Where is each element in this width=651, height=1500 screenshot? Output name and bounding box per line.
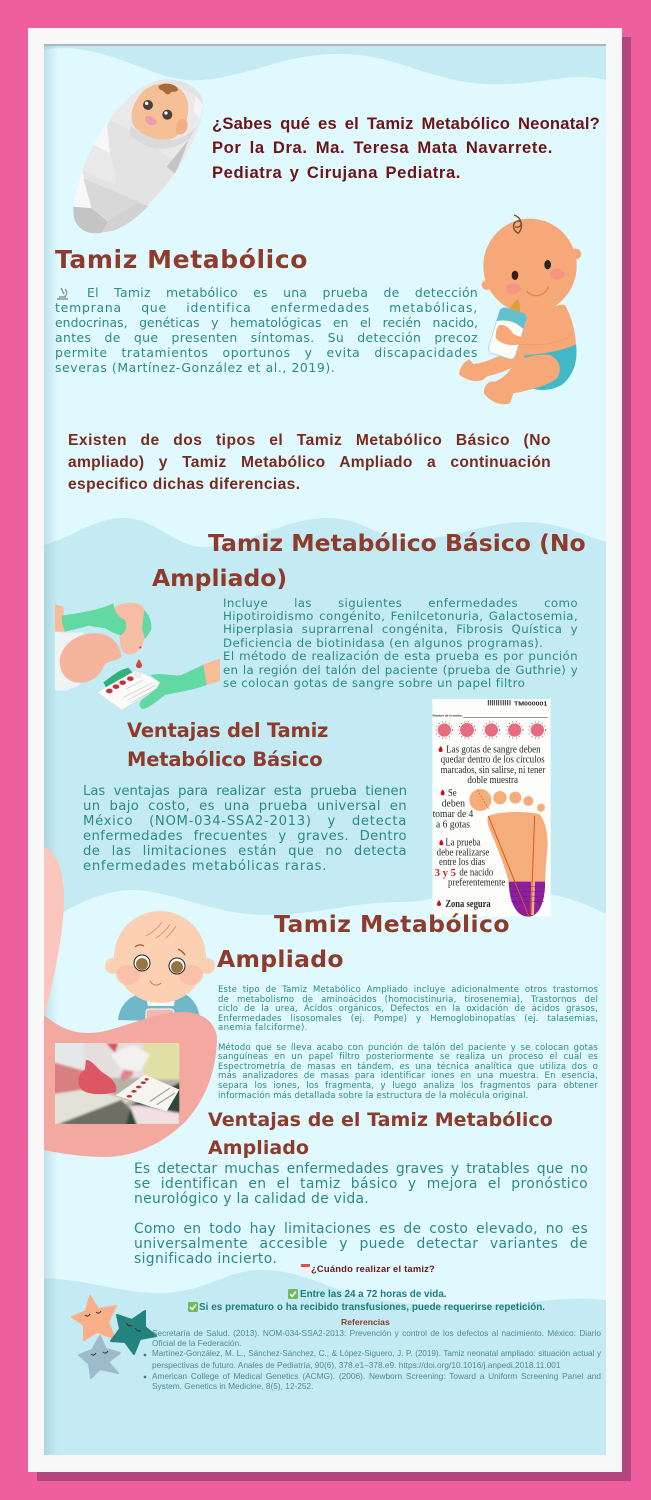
- text block: tamiz definition: [55, 284, 478, 374]
- icon: check mark two: [188, 1302, 198, 1312]
- chart: heel sampling card: debe realizarse: [437, 847, 490, 858]
- heading: Ventajas de el Tamiz Metabólico Ampliado: Ampliado: [208, 1137, 309, 1159]
- title: ¿Sabes qué es el Tamiz Metabólico Neonatal?: [212, 114, 600, 132]
- text block: tamiz definition: antes de que presenten síntomas. Su detección precoz: [55, 330, 478, 344]
- text block: tamiz definition: El Tamiz metabólico es una prueba de detección: [87, 284, 478, 300]
- text block: basic advantages: enfermedades metabólicas raras.: [83, 858, 327, 874]
- text block: basic advantages: un bajo costo, es una prueba universal en: [83, 798, 407, 814]
- title: [212, 114, 600, 182]
- text: timing recommendation: Entre las 24 a 72 horas de vida.: [300, 1289, 447, 1300]
- text block: two types intro: ampliado) y Tamiz Metabólico Ampliado a continuación: [68, 454, 551, 470]
- text block: expanded advantages: universalmente accesible y puede detectar variantes de: [134, 1236, 588, 1252]
- heading: Tamiz Metabólico Básico: [152, 529, 586, 592]
- text block: basic tamiz description: [223, 596, 578, 690]
- chart: heel sampling card: tomar de 4: [433, 809, 473, 820]
- chart: heel sampling card: preferentemente: [448, 877, 506, 888]
- text block: expanded tamiz description: [218, 984, 598, 1101]
- title: Pediatra y Cirujana Pediatra.: [212, 162, 461, 182]
- chart: heel sampling card: Zona segura: [445, 899, 491, 910]
- text block: two types intro: [68, 432, 551, 492]
- text block: references list: Secretaría de Salud. (2013). NOM-034-SSA2-2013: Prevención y control de los defectos al nacimiento. México: Diario: [152, 1328, 601, 1338]
- text block: basic tamiz description: en la región del talón del paciente (prueba de Guthrie) y: [223, 663, 578, 677]
- chart: heel sampling card: entre los días: [439, 857, 485, 868]
- chart: heel sampling card: TM000001: [514, 701, 547, 707]
- text block: expanded advantages: Es detectar muchas enfermedades graves y tratables que no: [134, 1160, 588, 1176]
- text block: expanded tamiz description: información más detallada sobre la estructura de la molécula original.: [218, 1091, 529, 1101]
- heading: Ventajas de el Tamiz Metabólico Ampliado: Ventajas de el Tamiz Metabólico: [208, 1109, 553, 1131]
- chart: heel sampling card: doble muestra: [467, 775, 518, 786]
- icon: microscope: [57, 288, 68, 300]
- text block: basic advantages: México (NOM-034-SSA2-2013) y detecta: [83, 814, 407, 828]
- text block: references list: perspectivas de futuro. Anales de Pediatría, 90(6), 378.e1–378.e9. https://doi.org/10.1016/j.anpedi.2018.11.001: [152, 1360, 561, 1370]
- text block: basic tamiz description: se colocan gotas de sangre sobre un papel filtro: [223, 676, 525, 690]
- heading: Ventajas de el Tamiz Metabólico Ampliado: [208, 1109, 553, 1159]
- heading: Tamiz Metabólico Ampliado: Tamiz Metabólico: [274, 910, 510, 938]
- chart: heel sampling card: Se: [448, 788, 457, 799]
- chart: heel sampling card: de nacido: [459, 868, 493, 879]
- text block: references list: Oficial de la Federación.: [152, 1338, 241, 1348]
- text block: tamiz definition: severas (Martínez-González et al., 2019).: [55, 360, 335, 374]
- heading: Ventajas del Tamiz Metabólico Básico: Ventajas del Tamiz: [127, 719, 328, 742]
- text block: expanded tamiz description: Espectrometría de masas en tándem, es una técnica analítica que utiliza dos o: [218, 1062, 598, 1072]
- icon: calendar: [301, 1264, 310, 1274]
- text block: two types intro: Existen de dos tipos el Tamiz Metabólico Básico (No: [68, 432, 551, 448]
- text block: references list: [152, 1328, 601, 1391]
- text block: basic tamiz description: Incluye las siguientes enfermedades como: [223, 596, 578, 610]
- text block: expanded tamiz description: anemia falciforme).: [218, 1023, 308, 1033]
- text block: tamiz definition: temprana que identifica enfermedades metabólicas,: [55, 300, 478, 314]
- chart: heel sampling card: quedar dentro de los círculos: [441, 755, 545, 766]
- heading: Tamiz Metabólico Ampliado: Ampliado: [217, 945, 344, 973]
- chart: heel sampling card: Las gotas de sangre deben: [446, 744, 541, 755]
- text block: expanded tamiz description: Método que se lleva acabo con punción de talón del paciente y se colocan gotas: [218, 1043, 598, 1053]
- text block: expanded advantages: Como en todo hay limitaciones es de costo elevado, no es: [134, 1221, 588, 1237]
- chart: heel sampling card: La prueba: [445, 838, 481, 849]
- text block: basic tamiz description: Hipotiroidismo congénito, Fenilcetonuria, Galactosemia,: [223, 609, 578, 623]
- text block: expanded advantages: [134, 1160, 588, 1267]
- heading: Ventajas del Tamiz Metabólico Básico: Metabólico Básico: [127, 748, 322, 771]
- text block: expanded tamiz description: Este tipo de Tamiz Metabólico Ampliado incluye adicionalmente otros trastornos: [218, 985, 598, 995]
- heading: Ventajas del Tamiz Metabólico Básico: [127, 719, 328, 771]
- text block: basic advantages: [83, 784, 407, 874]
- heading: references: Referencias: [341, 1317, 390, 1327]
- text block: tamiz definition: permite tratamientos oportunos y evita discapacidades: [55, 344, 478, 360]
- heading: Tamiz Metabólico Básico: Tamiz Metabólico Básico (No: [208, 529, 586, 557]
- icon: check mark one: [288, 1289, 298, 1299]
- text block: expanded tamiz description: ciclo de la urea, Ácidos orgánicos, Defectos en la oxidación de ácidos grasos,: [218, 1004, 598, 1014]
- heading: Tamiz Metabólico Ampliado: [217, 910, 510, 973]
- chart: heel sampling card: Nombre de la madre:: [433, 714, 463, 718]
- heading: Tamiz Metabólico: Tamiz Metabólico: [55, 245, 308, 274]
- text block: references list: American College of Medical Genetics (ACMG). (2006). Newborn Screening: Toward a Uniform Screening Panel and: [152, 1371, 601, 1381]
- text block: expanded tamiz description: separa los iones, los fragmenta, y luego analiza los fragmentos para obtener: [218, 1081, 598, 1091]
- text block: basic advantages: Las ventajas para realizar esta prueba tienen: [83, 784, 407, 798]
- photo: heel blood sample: [55, 1043, 180, 1124]
- text block: expanded tamiz description: de metabolismo de aminoácidos (homocistinuria, tirosenemia), Trastornos del: [218, 995, 598, 1005]
- text block: expanded tamiz description: más analizadores de masas para identificar iones en una muestra. En esencia,: [218, 1071, 598, 1081]
- heading: when to do the test: ¿Cuándo realizar el tamiz?: [311, 1263, 435, 1274]
- text block: two types intro: especifico dichas diferencias.: [68, 476, 300, 492]
- text block: basic tamiz description: El método de realización de esta prueba es por punción: [223, 649, 578, 663]
- text block: expanded advantages: se identifican en el tamiz básico y mejora el pronóstico: [134, 1176, 588, 1192]
- chart: heel sampling card: a 6 gotas: [436, 820, 470, 831]
- title: Por la Dra. Ma. Teresa Mata Navarrete.: [212, 138, 553, 157]
- text block: basic tamiz description: Hiperplasia suprarrenal congénita, Fibrosis Quística y: [223, 622, 578, 636]
- text block: expanded tamiz description: Enfermedades lisosomales (ej. Pompe) y Hemoglobinopatías (ej. talasemias,: [218, 1014, 598, 1024]
- text block: basic advantages: enfermedades frecuentes y graves. Dentro: [83, 828, 407, 844]
- text block: expanded advantages: significado incierto.: [134, 1251, 277, 1267]
- heading: Tamiz Metabólico Básico: Ampliado): [152, 564, 287, 592]
- text block: basic tamiz description: Deficiencia de biotinidasa (en algunos programas).: [223, 636, 543, 650]
- chart: heel sampling card: deben: [442, 798, 465, 809]
- chart: heel sampling card: 3 y 5: [435, 868, 456, 879]
- text block: references list: System. Genetics in Medicine, 8(5), 12-252.: [152, 1381, 313, 1391]
- text block: expanded tamiz description: sanguíneas en un papel filtro posteriormente se realiza un proceso el cual es: [218, 1052, 598, 1062]
- text block: basic advantages: de las limitaciones están que no detecta: [83, 844, 407, 858]
- text block: expanded advantages: neurológico y la calidad de vida.: [134, 1191, 369, 1207]
- text block: references list: Martínez-González, M. L., Sánchez-Sánchez, C., & López-Siguero, J. P. (2019). Tamiz neonatal ampliado: situación actual y: [152, 1349, 601, 1358]
- chart: heel sampling card: marcados, sin salirse, ni tener: [441, 765, 546, 776]
- text block: tamiz definition: endocrinas, genéticas y hematológicas en el recién nacido,: [55, 314, 478, 330]
- text: premature recommendation: Si es prematuro o ha recibido transfusiones, puede requerirse repetición.: [199, 1302, 545, 1313]
